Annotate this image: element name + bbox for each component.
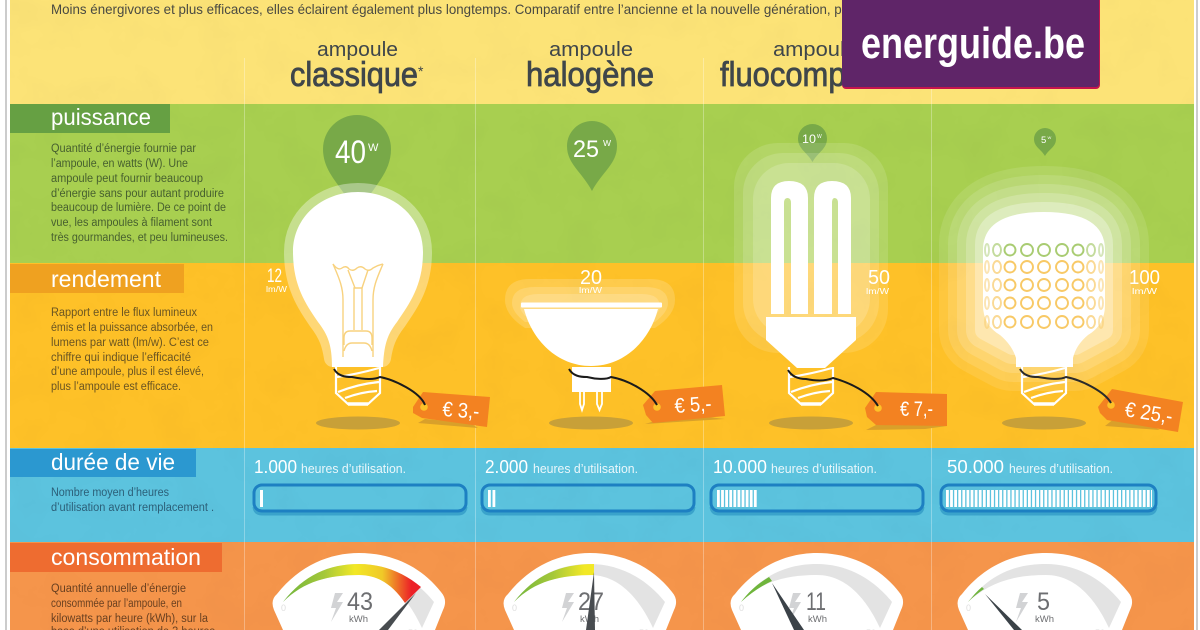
efficiency: 100 lm/W: lm/W bbox=[1132, 287, 1158, 296]
marker: 5 W bbox=[1034, 128, 1056, 156]
text: rendement description: émis et la puissance absorbée, en bbox=[51, 322, 213, 334]
text: rendement description: chiffre qui indique l’efficacité bbox=[51, 352, 191, 364]
text: rendement description: plus l’ampoule est efficace. bbox=[51, 381, 181, 393]
gauge: 5 kWh: 5 bbox=[1037, 588, 1050, 616]
column heading: fluocompacte: fluocompacte bbox=[720, 56, 904, 94]
efficiency: 50 lm/W: lm/W bbox=[866, 287, 890, 296]
intro text: Moins énergivores et plus efficaces, elles éclairent également plus longtemps. Comparatif entre l’ancienne et la nouvelle génération, pour bbox=[51, 1, 861, 17]
gauge: 11 kWh: 11 bbox=[806, 588, 826, 616]
bulb: LED bbox=[983, 212, 1105, 430]
text: consommation description: kilowatts par heure (kWh), sur la bbox=[51, 613, 209, 625]
text: puissance description bbox=[51, 143, 228, 244]
lifetime: 2.000 heures: heures d’utilisation. bbox=[533, 462, 638, 476]
gauge: 43 kWh: kWh bbox=[349, 614, 368, 625]
bulb: fluocompacte bbox=[734, 143, 888, 430]
marker: 40 W: 40 bbox=[335, 134, 366, 170]
text: consommation description bbox=[51, 583, 215, 630]
section: consommation bbox=[10, 543, 222, 630]
marker: 5 W: 5 bbox=[1041, 135, 1046, 146]
text: puissance description: Quantité d’énergie fournie par bbox=[51, 143, 196, 155]
text: duree de vie description: d’utilisation avant remplacement . bbox=[51, 502, 214, 514]
band: header yellow bbox=[10, 0, 1194, 104]
lifetime: 1.000 heures: 1.000 bbox=[254, 457, 297, 477]
lifetime: 50.000 heures: 50.000 bbox=[947, 457, 1004, 477]
gauge: 11 kWh: 0 bbox=[739, 603, 744, 613]
efficiency: 12 lm/W: 12 bbox=[267, 266, 282, 287]
text: rendement description: Rapport entre le flux lumineux bbox=[51, 307, 197, 319]
efficiency: 100 lm/W: 100 bbox=[1129, 267, 1160, 289]
heading: rendement: rendement bbox=[51, 266, 162, 292]
column heading: classique: ampoule bbox=[317, 39, 398, 61]
column heading: halogene: halogène bbox=[526, 56, 654, 94]
price tag: 25 euros bbox=[1020, 369, 1183, 432]
text: puissance description: beaucoup de lumière. De ce point de bbox=[51, 202, 226, 214]
logo: energuide.be: energuide.be bbox=[861, 19, 1085, 68]
column heading: fluocompacte: ampoule bbox=[773, 39, 857, 61]
marker: 25 W: W bbox=[603, 138, 611, 148]
lifetime: 2.000 heures bbox=[482, 457, 694, 514]
band: rendement amber bbox=[10, 263, 1194, 448]
gauge: 11 kWh bbox=[731, 553, 903, 630]
lifetime: 10.000 heures bbox=[711, 457, 923, 514]
marker: 40 W bbox=[323, 115, 391, 212]
lifetime: 50.000 heures bbox=[941, 457, 1156, 514]
column heading: classique: classique bbox=[290, 56, 418, 94]
heading: puissance bbox=[10, 104, 170, 133]
heading: consommation: consommation bbox=[51, 544, 201, 570]
gauge: 5 kWh bbox=[958, 553, 1132, 630]
heading: rendement bbox=[10, 264, 184, 293]
efficiency: 50 lm/W bbox=[866, 267, 890, 296]
bulb: classique bbox=[293, 192, 423, 430]
gauge: 27 kWh bbox=[504, 553, 676, 630]
section: puissance bbox=[10, 104, 228, 244]
text: consommation description: consommée par l’ampoule, en bbox=[51, 598, 182, 610]
text: rendement description: lumens par watt (lm/w). C’est ce bbox=[51, 337, 209, 349]
lifetime: 1.000 heures bbox=[254, 457, 466, 514]
column heading: halogene: ampoule bbox=[549, 39, 633, 61]
price tag: 5 euros bbox=[569, 369, 725, 424]
price tag: 3 euros: € 3,- bbox=[442, 398, 480, 424]
heading: duree de vie: durée de vie bbox=[51, 449, 175, 475]
price tag: 25 euros: € 25,- bbox=[1123, 398, 1174, 428]
gauge: 5 kWh: 0 bbox=[966, 603, 971, 613]
text: duree de vie description bbox=[51, 487, 214, 514]
price tag: 3 euros bbox=[334, 369, 490, 428]
heading: duree de vie bbox=[10, 449, 196, 477]
text: puissance description: très gourmandes, et peu lumineuses. bbox=[51, 232, 228, 244]
lifetime: 2.000 heures: 2.000 bbox=[485, 457, 528, 477]
efficiency: 20 lm/W: 20 bbox=[580, 267, 602, 289]
bulb: halogene bbox=[505, 279, 675, 430]
gauge: 27 kWh: 0 bbox=[512, 603, 517, 613]
marker: 10 W bbox=[798, 124, 827, 162]
price tag: 7 euros bbox=[788, 370, 947, 430]
gauge: 43 kWh: 0 bbox=[281, 603, 286, 613]
band: consommation orange bbox=[10, 542, 1194, 630]
price tag: 5 euros: € 5,- bbox=[674, 392, 712, 418]
text: rendement description bbox=[51, 307, 213, 393]
column heading: fluocompacte bbox=[720, 39, 904, 94]
text: duree de vie description: Nombre moyen d’heures bbox=[51, 487, 169, 499]
gauge: 27 kWh: kWh bbox=[580, 614, 599, 625]
price tag: 7 euros: € 7,- bbox=[900, 398, 933, 421]
text: puissance description: l’ampoule, en watts (W). Une bbox=[51, 158, 188, 170]
heading: puissance: puissance bbox=[51, 104, 151, 130]
column heading: classique: * bbox=[418, 63, 424, 79]
band: puissance green bbox=[10, 104, 1194, 263]
marker: 25 W: 25 bbox=[573, 136, 599, 163]
efficiency: 50 lm/W: 50 bbox=[868, 267, 890, 289]
text: consommation description: Quantité annuelle d’énergie bbox=[51, 583, 186, 595]
marker: 5 W: W bbox=[1048, 135, 1052, 140]
efficiency: 12 lm/W bbox=[266, 266, 288, 294]
efficiency: 12 lm/W: lm/W bbox=[266, 285, 288, 294]
gauge: 43 kWh: 43 bbox=[347, 588, 373, 616]
text: puissance description: d’énergie sans pour autant produire bbox=[51, 188, 224, 200]
text: puissance description: ampoule peut fournir beaucoup bbox=[51, 173, 203, 185]
marker: 40 W: W bbox=[368, 142, 379, 154]
gauge: 27 kWh: 27 bbox=[578, 588, 604, 616]
lifetime: 10.000 heures: 10.000 bbox=[713, 457, 767, 477]
band: duree de vie blue bbox=[10, 448, 1194, 542]
marker: 10 W: W bbox=[817, 134, 822, 140]
gauge: 11 kWh: kWh bbox=[808, 614, 827, 625]
text: puissance description: vue, les ampoules à filament sont bbox=[51, 217, 213, 229]
section: rendement bbox=[10, 264, 213, 393]
efficiency: 20 lm/W: lm/W bbox=[579, 286, 603, 295]
marker: 10 W: 10 bbox=[802, 132, 816, 146]
column heading: classique bbox=[290, 39, 424, 94]
text: rendement description: d’une ampoule, plus il est élevé, bbox=[51, 366, 204, 378]
gauge: 5 kWh: kWh bbox=[1035, 614, 1054, 625]
heading: consommation bbox=[10, 543, 222, 572]
lifetime: 50.000 heures: heures d’utilisation. bbox=[1009, 462, 1113, 476]
column heading: halogene bbox=[526, 39, 654, 94]
gauge: 43 kWh bbox=[273, 553, 445, 630]
section: duree de vie bbox=[10, 449, 214, 514]
logo: energuide.be bbox=[842, 0, 1100, 89]
marker: 25 W bbox=[567, 121, 617, 191]
lifetime: 10.000 heures: heures d’utilisation. bbox=[771, 462, 877, 476]
lifetime: 1.000 heures: heures d’utilisation. bbox=[301, 462, 406, 476]
